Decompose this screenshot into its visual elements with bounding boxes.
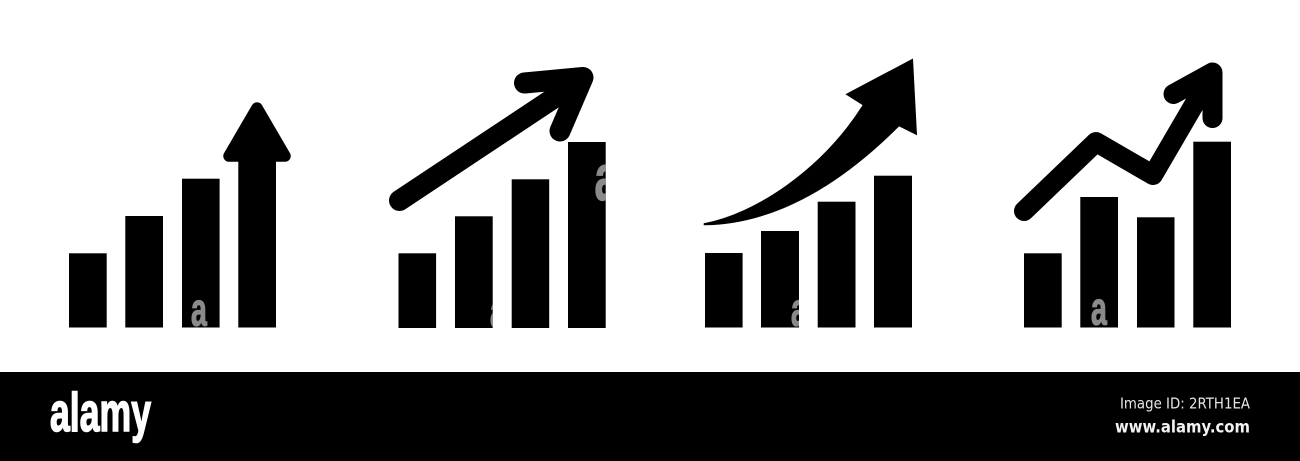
bars ascending [398, 142, 606, 328]
watermark letters: a [490, 286, 506, 338]
watermark letter: a [191, 285, 207, 336]
arrow: vertical up arrow [229, 108, 285, 328]
footer band [0, 372, 1300, 461]
watermark letter: a [1091, 284, 1107, 335]
logo: alamy: alamy [50, 381, 151, 443]
bars ascending [705, 176, 912, 328]
icon: bar chart with straight diagonal arrow [398, 78, 618, 338]
watermark letter: a [791, 285, 807, 336]
icon: bar chart with up arrow [69, 108, 285, 336]
bars ascending [69, 179, 220, 328]
arrow: zigzag line [1024, 72, 1212, 211]
website: www.alamy.com [1115, 418, 1250, 436]
bars uneven [1024, 142, 1231, 328]
icon: bar chart with zigzag arrow [1024, 72, 1231, 335]
watermark letters [490, 164, 606, 327]
arrow: curved sweep [704, 59, 917, 225]
arrow: straight diagonal [400, 78, 583, 200]
image id: Image ID: 2RTH1EA [1120, 394, 1251, 412]
watermark letters: a [594, 142, 618, 214]
icon: bar chart with curved arrow [704, 59, 917, 336]
